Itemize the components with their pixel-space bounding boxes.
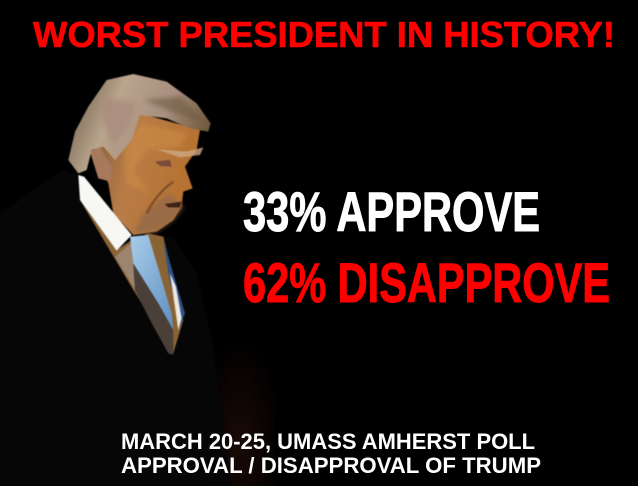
hair — [68, 74, 211, 173]
jaw shadow — [133, 193, 183, 233]
tie lower dark — [133, 263, 173, 355]
white shirt strip — [170, 273, 182, 330]
suit jacket — [0, 170, 230, 486]
title: WORST PRESIDENT IN HISTORY! — [33, 14, 615, 55]
source line 2: APPROVAL / DISAPPROVAL OF TRUMP — [121, 453, 541, 478]
eyebrow — [157, 147, 203, 157]
hair streak — [100, 97, 137, 147]
approve stat: 33% APPROVE — [243, 180, 540, 243]
photo: man in dark suit — [0, 74, 230, 486]
tan waistcoat — [80, 200, 183, 353]
blue shirt strip — [163, 240, 185, 327]
dark hair lock — [143, 97, 207, 123]
neck and face — [92, 113, 200, 235]
forehead highlight — [123, 123, 187, 193]
mouth — [165, 202, 182, 207]
eye — [155, 160, 172, 167]
background glow — [205, 310, 275, 486]
tie — [130, 235, 173, 330]
shirt panel — [115, 243, 135, 290]
cheek fold — [147, 182, 173, 213]
source line 1: MARCH 20-25, UMASS AMHERST POLL — [121, 429, 535, 454]
ear — [90, 147, 112, 182]
shirt collar — [78, 175, 132, 251]
